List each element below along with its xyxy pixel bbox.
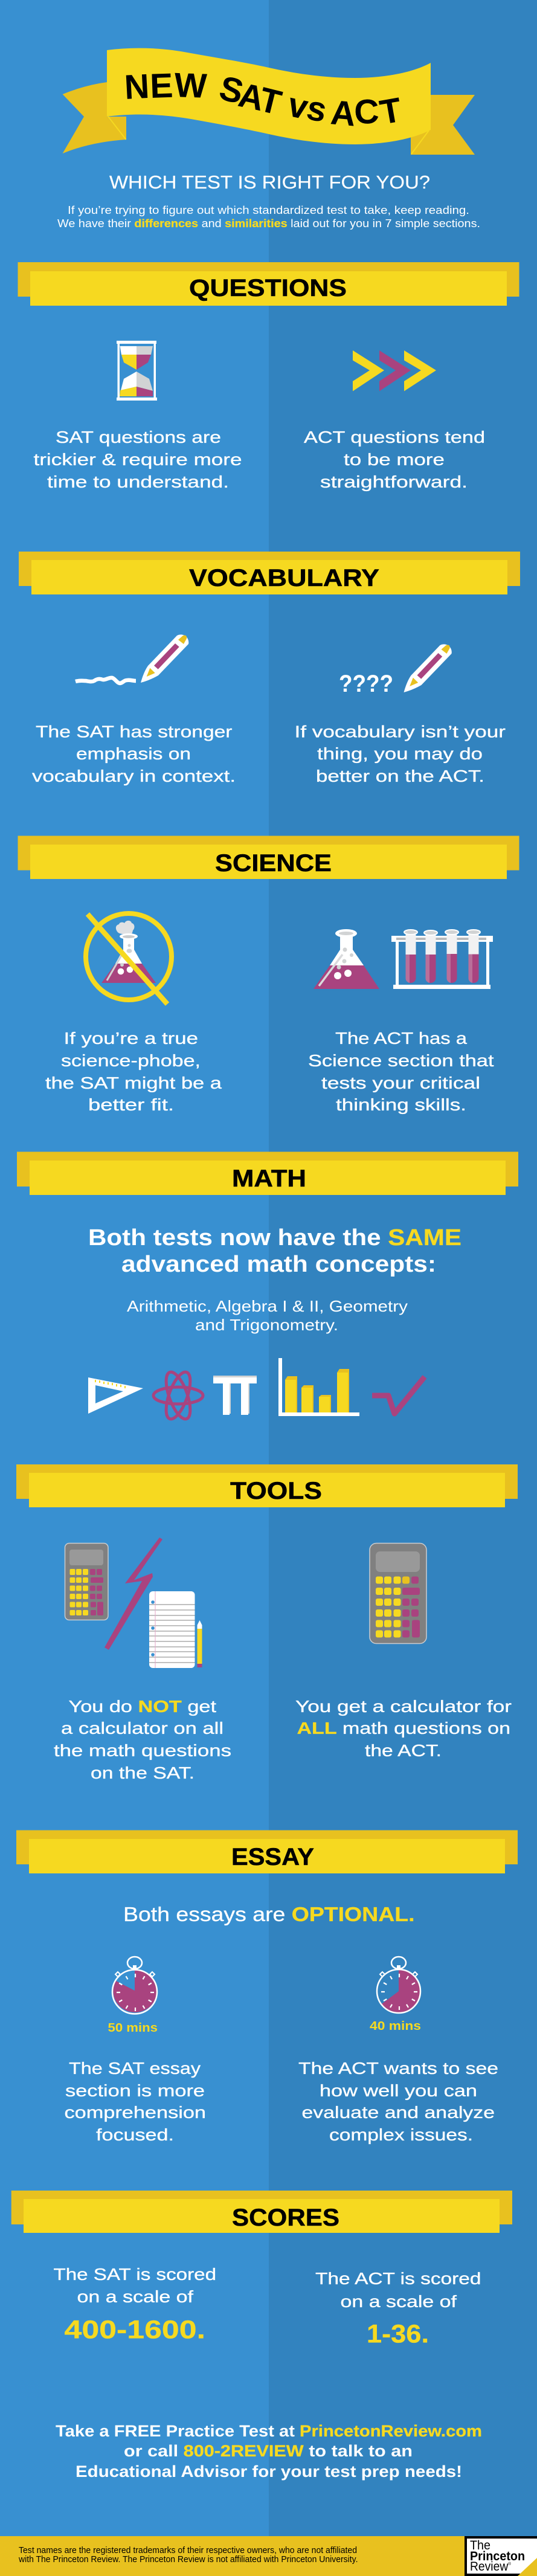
title ribbon	[63, 48, 475, 155]
icon: notebook paper	[149, 1591, 195, 1668]
text: SAT questions: trickier & require more	[34, 450, 242, 469]
section banner: questions: QUESTIONS	[189, 275, 347, 301]
text: ACT essay: how well you can	[320, 2081, 477, 2100]
call to action: or call 800-2REVIEW to talk to an	[124, 2442, 413, 2460]
text: ACT essay	[298, 2059, 498, 2144]
section banner: vocabulary	[19, 552, 520, 594]
text: ACT science: The ACT has a	[335, 1029, 467, 1048]
title text: NEW SAT vs ACT	[123, 66, 405, 134]
heading: same math concepts: advanced math concepts:	[121, 1252, 436, 1277]
section banner: tools: TOOLS	[230, 1478, 322, 1504]
icon: large calculator	[370, 1543, 426, 1643]
text: ACT tools: ALL math questions on	[297, 1719, 510, 1737]
text: ACT tools	[295, 1697, 512, 1760]
text: ACT scores: on a scale of	[341, 2292, 457, 2311]
text: ACT essay: complex issues.	[329, 2125, 473, 2144]
icon: bar chart	[278, 1358, 359, 1416]
text: SAT vocabulary: emphasis on	[76, 744, 191, 763]
label: 50 mins: 50 mins	[108, 2021, 158, 2035]
logo: The Princeton Review	[465, 2536, 537, 2576]
icon: flask and test tube rack	[314, 929, 493, 989]
text: SAT essay	[64, 2059, 206, 2144]
text: SAT tools: on the SAT.	[91, 1763, 195, 1782]
icon: pen with squiggle	[76, 634, 188, 683]
label: 40 mins: 40 mins	[370, 2020, 421, 2033]
text: math topics: Arithmetic, Algebra I & II, Geometry	[127, 1297, 408, 1315]
icon: crossed-out flask	[86, 913, 172, 1004]
text: ACT essay: The ACT wants to see	[298, 2059, 498, 2078]
text: SAT science: science-phobe,	[61, 1051, 201, 1070]
logo: The Princeton Review: ®	[508, 2562, 512, 2566]
heading: same math concepts	[88, 1225, 461, 1277]
text: SAT scores: on a scale of	[77, 2287, 193, 2306]
text: SAT science: the SAT might be a	[45, 1074, 222, 1092]
section banner: essay	[16, 1831, 518, 1873]
score range: 400-1600: 400-1600.	[64, 2315, 205, 2344]
text: SAT science: better fit.	[88, 1095, 174, 1114]
section banner: tools	[16, 1464, 518, 1507]
disclaimer text	[18, 2545, 358, 2565]
intro paragraph: If you’re trying to figure out which standardized test to take, keep reading.	[68, 204, 469, 216]
text: SAT essay: comprehension	[64, 2103, 206, 2122]
icon: pencil	[197, 1620, 202, 1667]
icon: pi symbol	[213, 1376, 257, 1415]
icon: question marks with pen: ????	[339, 671, 393, 697]
section banner: vocabulary: VOCABULARY	[189, 565, 379, 591]
text: ACT tools: the ACT.	[365, 1741, 442, 1760]
text: ACT science: Science section that	[308, 1051, 494, 1070]
icon: 50 minute stopwatch	[112, 1957, 157, 2014]
text: ACT vocabulary: better on the ACT.	[316, 767, 484, 785]
call to action: Take a FREE Practice Test at PrincetonReview.com	[56, 2422, 482, 2440]
section banner: questions	[18, 262, 519, 306]
section banner: math: MATH	[232, 1165, 306, 1192]
text: SAT questions	[34, 428, 242, 491]
intro paragraph	[57, 204, 480, 230]
text: SAT scores: The SAT is scored	[53, 2265, 216, 2284]
section banner: essay: ESSAY	[231, 1844, 314, 1870]
icon: chevrons	[353, 350, 436, 391]
text: math topics: and Trigonometry.	[195, 1316, 338, 1334]
icon: set square	[88, 1377, 143, 1414]
text: ACT science	[308, 1029, 494, 1114]
heading: essays optional: Both essays are OPTIONAL.	[123, 1903, 414, 1925]
text: ACT scores: The ACT is scored	[315, 2269, 481, 2288]
text: ACT questions: straightforward.	[320, 472, 468, 491]
text: math topics	[127, 1297, 408, 1334]
call to action: Educational Advisor for your test prep needs!	[76, 2462, 462, 2481]
icon: hourglass	[117, 341, 157, 401]
text: SAT tools: the math questions	[54, 1741, 231, 1760]
logo: The Princeton Review: The	[470, 2539, 490, 2552]
icon: lightning bolt	[105, 1538, 162, 1650]
text: SAT questions: SAT questions are	[56, 428, 221, 446]
text: ACT vocabulary: If vocabulary isn’t your	[295, 723, 506, 741]
text: ACT science: tests your critical	[321, 1074, 480, 1092]
text: SAT essay: section is more	[65, 2081, 205, 2100]
heading: same math concepts: Both tests now have the SAME	[88, 1225, 461, 1251]
text: ACT essay: evaluate and analyze	[302, 2103, 495, 2122]
text: ACT questions	[304, 428, 485, 491]
text: SAT essay: The SAT essay	[69, 2059, 201, 2078]
intro paragraph: We have their differences and similarities laid out for you in 7 simple sections.	[57, 217, 480, 230]
section banner: math	[17, 1151, 518, 1195]
text: SAT vocabulary: The SAT has stronger	[36, 723, 232, 741]
icon: small calculator	[65, 1543, 108, 1620]
call to action	[56, 2422, 482, 2481]
text: ACT tools: You get a calculator for	[295, 1697, 512, 1716]
text: ACT science: thinking skills.	[336, 1095, 466, 1114]
text: SAT tools	[54, 1697, 231, 1782]
text: SAT scores	[53, 2265, 216, 2344]
text: ACT scores	[315, 2269, 481, 2349]
footer band	[0, 2536, 537, 2576]
icon: atom	[153, 1369, 203, 1422]
disclaimer text: with The Princeton Review. The Princeton Review is not affiliated with Princeton University.	[18, 2554, 358, 2565]
text: ACT questions: ACT questions tend	[304, 428, 485, 446]
text: SAT tools: a calculator on all	[61, 1719, 223, 1737]
section banner: science: SCIENCE	[215, 850, 332, 877]
icon: square root check	[372, 1377, 425, 1414]
text: ACT questions: to be more	[344, 450, 445, 469]
disclaimer text: Test names are the registered trademarks of their respective owners, who are not affiliated	[19, 2545, 357, 2555]
logo: The Princeton Review: Princeton	[470, 2549, 525, 2563]
section banner: science	[18, 836, 519, 879]
subtitle: WHICH TEST IS RIGHT FOR YOU?	[109, 172, 430, 193]
score range: 1-36: 1-36.	[367, 2320, 429, 2349]
text: ACT vocabulary: thing, you may do	[317, 744, 483, 763]
section banner: scores	[11, 2191, 512, 2233]
text: SAT vocabulary: vocabulary in context.	[32, 767, 236, 785]
logo: The Princeton Review: Review	[470, 2560, 512, 2574]
text: SAT science: If you’re a true	[64, 1029, 198, 1048]
icon: question marks with pen	[339, 644, 452, 697]
icon: 40 minute stopwatch	[377, 1957, 420, 2013]
text: SAT tools: You do NOT get	[69, 1697, 216, 1716]
text: SAT questions: time to understand.	[47, 472, 229, 491]
text: ACT vocabulary	[295, 723, 506, 785]
text: SAT science	[45, 1029, 222, 1114]
text: SAT essay: focused.	[96, 2125, 174, 2144]
section banner: scores: SCORES	[232, 2204, 339, 2231]
text: SAT vocabulary	[32, 723, 236, 785]
